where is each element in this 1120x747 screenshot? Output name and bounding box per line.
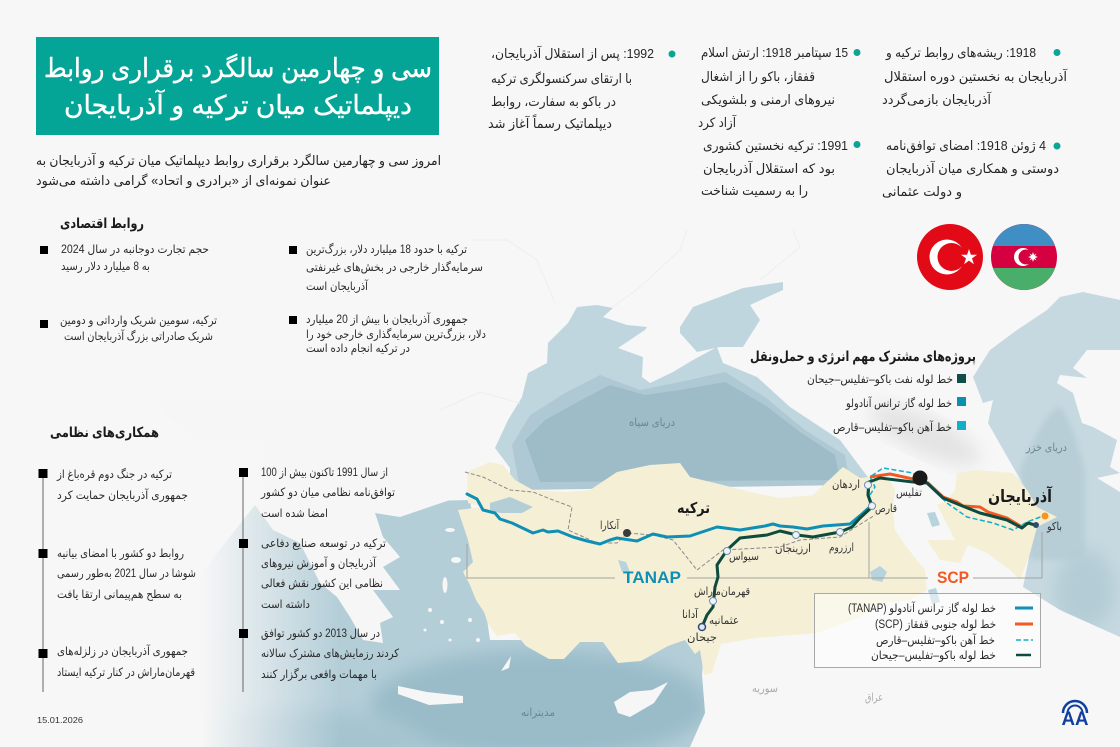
Black Sea <box>495 305 870 490</box>
marker: Ceyhan <box>698 624 706 630</box>
item: defence industry: ترکیه در توسعه صنایع دفاعی <box>261 538 386 551</box>
label: Tbilisi: تفلیس <box>896 487 922 499</box>
title text: دیپلماتیک میان ترکیه و آذربایجان <box>64 89 412 121</box>
project: railway: خط آهن باکو–تفلیس–قارص <box>833 420 952 435</box>
label: Ceyhan: جیحان <box>687 632 717 644</box>
timeline: 4 June 1918: 4 ژوئن 1918: امضای توافق‌نامه <box>886 138 1046 154</box>
item: Turkey investor <box>289 242 483 294</box>
title text: سی و چهارمین سالگرد برقراری روابط <box>44 53 432 84</box>
label: Turkey: ترکیه <box>677 500 710 517</box>
Turkey land <box>458 462 927 675</box>
intro text: امروز سی و چهارمین سالگرد برقراری روابط دیپلماتیک میان ترکیه و آذربایجان به <box>36 152 441 169</box>
label: TANAP: TANAP <box>623 568 681 587</box>
item: bilateral trade <box>40 244 209 274</box>
Sea of Azov <box>680 282 783 352</box>
timeline: 1991 <box>701 138 848 199</box>
item: military agreements: امضا شده است <box>261 508 328 520</box>
item: earthquake: قهرمان‌ماراش در کنار ترکیه ایستاد <box>57 667 195 680</box>
item: Shusha declaration <box>38 548 196 602</box>
left fade <box>200 440 340 747</box>
intro text <box>36 152 441 189</box>
timeline: 1918 roots <box>882 45 1068 108</box>
label: Mediterranean: مدیترانه <box>521 707 555 719</box>
label: Ankara: آنکارا <box>600 518 620 532</box>
timeline: 1992: با ارتقای سرکنسولگری ترکیه <box>491 71 632 87</box>
label: Erzincan: ارزینجان <box>775 543 811 555</box>
flag: Turkey <box>917 224 983 290</box>
timeline: 15 September 1918: قفقاز، باکو را از اشغال <box>701 69 815 85</box>
timeline: 1992: 1992: پس از استقلال آذربایجان، <box>491 45 654 62</box>
Crete <box>398 686 463 705</box>
legend row: railway: خط آهن باکو–تفلیس–قارص <box>876 633 995 648</box>
item: joint exercises: در سال 2013 دو کشور توافق <box>261 628 380 641</box>
legend row: SCP: خط لوله جنوبی قفقاز (SCP) <box>875 619 996 632</box>
item: trade partner <box>40 315 217 344</box>
timeline: 1918 roots: آذربایجان بازمی‌گردد <box>882 91 992 108</box>
map labels <box>521 417 1067 719</box>
flags <box>917 224 1057 290</box>
timeline: 15 September 1918: آزاد کرد <box>698 114 737 131</box>
Caspian Sea <box>973 292 1120 637</box>
timeline: 1992: دیپلماتیک رسماً آغاز شد <box>488 114 612 132</box>
flag: Azerbaijan <box>991 224 1057 290</box>
item: Shusha declaration: روابط دو کشور با امضای بیانیه <box>57 548 184 561</box>
map legend <box>814 594 1040 668</box>
item: defence industry: نظامی این کشور نقش فعالی <box>261 578 383 591</box>
right timeline line <box>242 472 244 692</box>
title text <box>44 53 432 121</box>
item: defence industry: داشته است <box>261 599 310 611</box>
city markers <box>623 470 1048 630</box>
item: Turkey investor: ترکیه با حدود 18 میلیارد دلار، بزرگ‌ترین <box>306 242 467 257</box>
item: Karabakh war <box>38 467 188 503</box>
economic heading: روابط اقتصادی <box>60 215 144 232</box>
item: Turkey investor: سرمایه‌گذار خارجی در بخش‌های غیرنفتی <box>306 260 483 275</box>
marker: Ankara <box>623 529 631 537</box>
panel: economic relations <box>40 215 486 356</box>
label: Syria: سوریه <box>752 683 778 695</box>
panel: military cooperation <box>38 424 399 692</box>
timeline: 1918 roots: آذربایجان به نخستین دوره استقلال <box>884 68 1068 85</box>
Azerbaijan land <box>927 470 1057 580</box>
military heading: همکاری‌های نظامی <box>50 424 159 440</box>
timeline: 4 June 1918: و دولت عثمانی <box>882 184 962 200</box>
item: Azerbaijan investor: در ترکیه انجام داده است <box>306 343 410 356</box>
item: Azerbaijan investor <box>289 312 486 356</box>
pipeline: BTC <box>702 478 1035 627</box>
label: Ardahan: اردهان <box>832 479 860 491</box>
project: TANAP gas pipeline: خط لوله گاز ترانس آنادولو <box>845 396 952 411</box>
left timeline line <box>42 473 44 692</box>
Greece and Balkans land <box>150 400 480 643</box>
item: bilateral trade: به 8 میلیارد دلار رسید <box>61 261 150 274</box>
timeline bullets <box>668 49 1060 150</box>
timeline: 4 June 1918: دوستی و همکاری میان آذربایجان <box>886 160 1059 177</box>
Caucasus relief <box>863 393 987 477</box>
title box <box>36 37 439 135</box>
label: Iraq: عراق <box>865 692 883 704</box>
marker: Tbilisi <box>912 470 928 486</box>
pipeline: SCP <box>870 474 1022 527</box>
Mediterranean and Aegean sea <box>180 500 710 747</box>
icon: AA logo: AA <box>1062 709 1089 730</box>
legend row: TANAP: خط لوله گاز ترانس آنادولو (TANAP) <box>848 601 996 616</box>
project: BTC oil pipeline: خط لوله نفت باکو–تفلیس–جیحان <box>807 374 953 387</box>
timeline: 1918 roots: 1918: ریشه‌های روابط ترکیه و <box>885 45 1036 61</box>
item: Karabakh war: جمهوری آذربایجان حمایت کرد <box>57 488 188 503</box>
item: joint exercises <box>239 628 399 682</box>
label: Kahramanmaras: قهرمان‌ماراش <box>694 586 750 598</box>
panel: joint projects <box>750 348 976 435</box>
item: joint exercises: با مهمات واقعی برگزار کنند <box>261 667 377 682</box>
Aegean islands <box>424 528 511 671</box>
item: trade partner: ترکیه، سومین شریک وارداتی و دومین <box>60 315 217 328</box>
label: Black Sea: دریای سیاه <box>629 417 675 429</box>
label: SCP: SCP <box>937 568 969 587</box>
item: military agreements <box>239 467 395 520</box>
timeline: 1991: بود که استقلال آذربایجان <box>703 160 835 177</box>
item: earthquake: جمهوری آذربایجان در زلزله‌های <box>57 644 188 659</box>
label: Erzurum: ارزروم <box>829 542 854 554</box>
marker: Baku terminal <box>1042 512 1048 520</box>
label: Kars: قارص <box>875 503 897 515</box>
Cyprus <box>614 682 668 717</box>
rivers and borders <box>440 230 800 410</box>
label: Baku: باکو <box>1046 521 1062 533</box>
timeline: 1992: در باکو به سفارت، روابط <box>491 94 616 110</box>
item: defence industry: آذربایجان و آموزش نیروهای <box>261 556 377 571</box>
lakes <box>618 512 940 604</box>
item: defence industry <box>239 538 386 611</box>
item: joint exercises: کردند رزمایش‌های مشترک سالانه <box>261 647 399 661</box>
item: trade partner: شریک صادراتی بزرگ آذربایجان است <box>64 329 213 344</box>
item: Shusha declaration: شوشا در سال 2021 به‌طور رسمی <box>57 568 196 581</box>
map base <box>214 230 1120 747</box>
item: Shusha declaration: به سطح هم‌پیمانی ارتقا یافت <box>57 589 182 602</box>
label: Azerbaijan: آذربایجان <box>988 485 1053 506</box>
intro text: عنوان نمونه‌ای از «برادری و اتحاد» گرامی داشته می‌شود <box>36 173 331 189</box>
date: 15.01.2026 <box>37 715 83 725</box>
railway: Baku-Tbilisi-Kars <box>870 468 1043 530</box>
item: military agreements: از سال 1991 تاکنون بیش از 100 <box>261 467 388 480</box>
Sea of Marmara <box>490 497 533 513</box>
item: military agreements: توافق‌نامه نظامی میان دو کشور <box>260 487 395 500</box>
label: Caspian Sea: دریای خزر <box>1025 442 1067 454</box>
label: Sivas: سیواس <box>729 551 759 563</box>
timeline: 15 September 1918: 15 سپتامبر 1918: ارتش اسلام <box>701 45 848 61</box>
timeline: 1991: 1991: ترکیه نخستین کشوری <box>703 138 848 154</box>
label: Osmaniye: عثمانیه <box>709 615 739 627</box>
item: Azerbaijan investor: دلار، بزرگ‌ترین سرمایه‌گذاری خارجی خود را <box>306 327 486 342</box>
item: bilateral trade: حجم تجارت دوجانبه در سال 2024 <box>61 244 209 257</box>
item: Karabakh war: ترکیه در جنگ دوم قره‌باغ از <box>56 467 172 482</box>
legend row: BTC: خط لوله باکو–تفلیس–جیحان <box>871 650 996 663</box>
pipeline: TANAP <box>467 482 872 544</box>
label: Adana: آدانا <box>682 607 699 621</box>
station markers <box>710 482 876 604</box>
frame lines: TANAP and SCP brackets <box>467 522 1042 578</box>
projects heading: پروژه‌های مشترک مهم انرژی و حمل‌ونقل <box>750 348 976 365</box>
item: earthquake <box>38 644 195 680</box>
timeline: 15 September 1918 <box>698 45 848 131</box>
item: Turkey investor: آذربایجان است <box>306 279 369 294</box>
timeline: 4 June 1918 <box>882 138 1059 200</box>
panel: timeline <box>488 45 1068 200</box>
timeline: 15 September 1918: نیروهای ارمنی و بلشویکی <box>701 92 835 108</box>
marker: Baku <box>1033 522 1039 528</box>
road dashed line <box>465 472 875 570</box>
timeline: 1991: را به رسمیت شناخت <box>701 183 808 199</box>
item: Azerbaijan investor: جمهوری آذربایجان با بیش از 20 میلیارد <box>306 312 468 327</box>
timeline: 1992 <box>488 45 654 132</box>
